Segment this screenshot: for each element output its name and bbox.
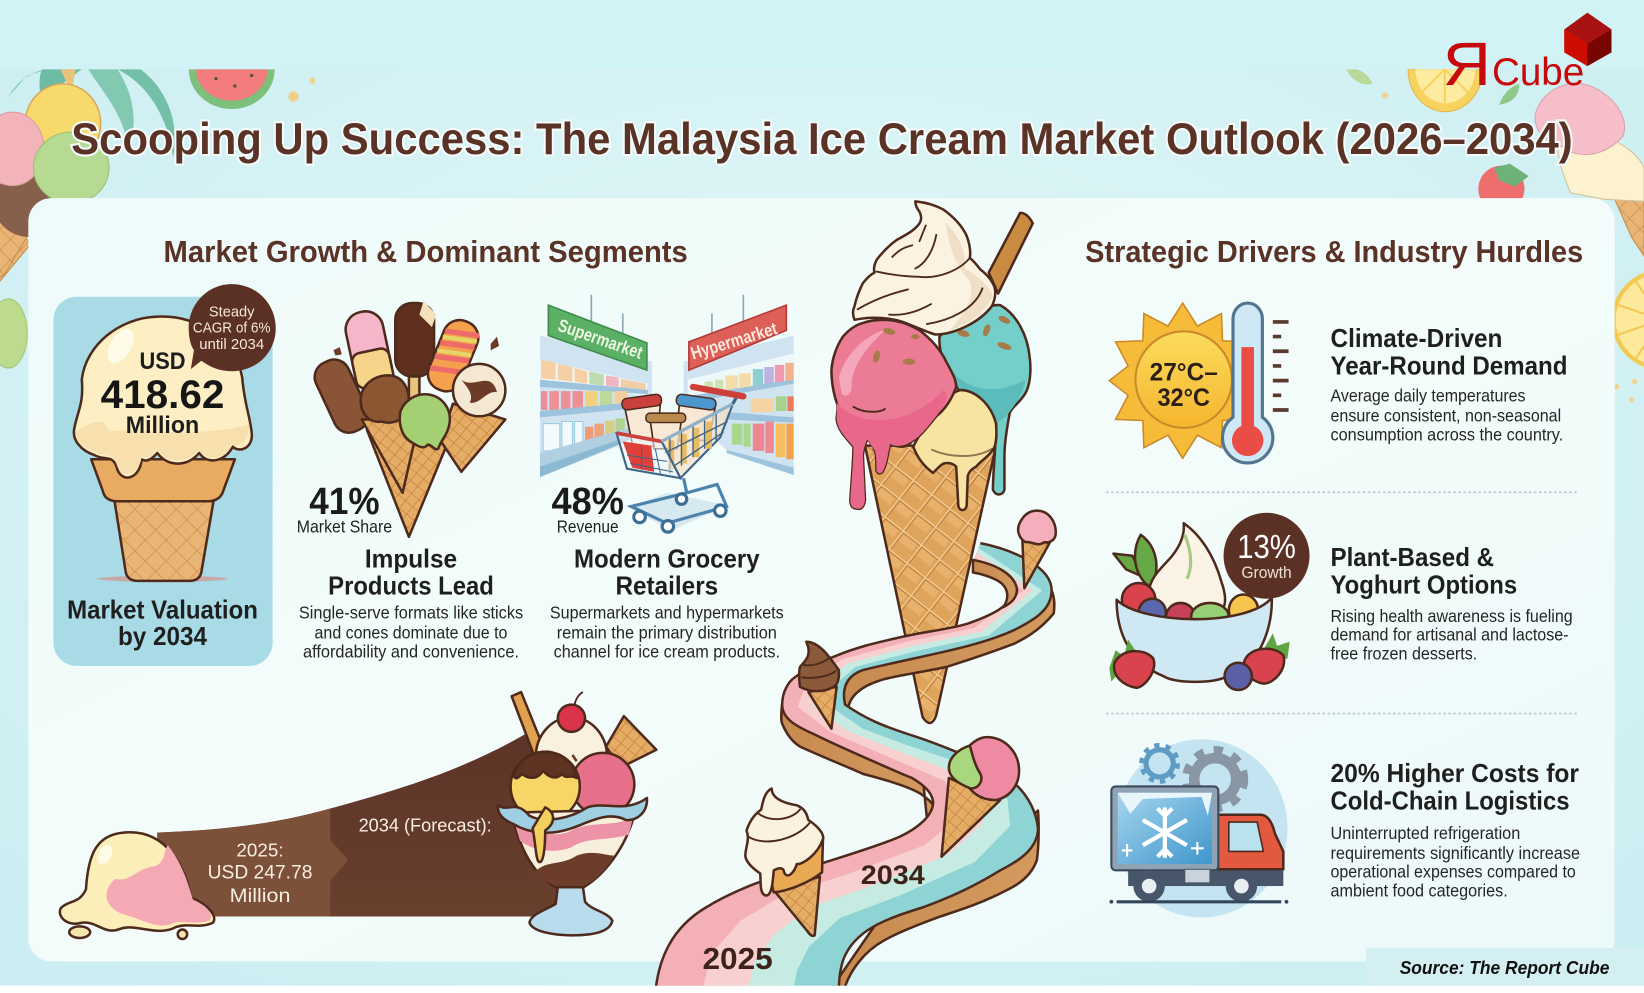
- callout: CAGR badge: CAGR of 6%: [193, 320, 271, 336]
- stat: 41% market share: [297, 480, 392, 537]
- sign: Hypermarket: Hypermarket: [688, 318, 779, 363]
- growth area: [157, 729, 561, 916]
- top band: [0, 0, 1644, 69]
- item: plant-based text: Yoghurt Options: [1331, 569, 1517, 599]
- left shelf: [540, 336, 652, 477]
- panel: market valuation card: [53, 284, 276, 666]
- item: climate text: ensure consistent, non-seasonal: [1331, 406, 1561, 426]
- panel: impulse products: [297, 301, 524, 661]
- label: 2025: 2025: [702, 942, 773, 976]
- impulse heading: [328, 543, 494, 601]
- icon: vanilla soft-serve cone: [745, 789, 823, 936]
- source note: Source: The Report Cube: [1400, 957, 1609, 978]
- label: 2034: 2034: [861, 859, 926, 890]
- item: plant-based text: demand for artisanal and lactose-: [1331, 625, 1569, 645]
- callout: 13% growth badge: 13%: [1237, 529, 1296, 566]
- grocery heading: Modern Grocery: [574, 543, 760, 573]
- impulse description: Single-serve formats like sticks: [299, 603, 524, 623]
- chart: market growth area 2025 to 2034: [60, 692, 656, 939]
- logo: RCube: [1443, 13, 1611, 98]
- impulse description: affordability and convenience.: [303, 641, 519, 661]
- label: 2025 value: USD 247.78: [208, 862, 312, 884]
- item: cold-chain text: requirements significantly increase: [1331, 843, 1580, 863]
- icon: sun with temperature: 27°C–: [1150, 359, 1218, 387]
- value text: [101, 348, 224, 439]
- road edge band: upper segment: [839, 590, 1054, 709]
- grocery description: remain the primary distribution: [557, 623, 777, 643]
- icon: melted scoop: [60, 832, 214, 939]
- icon: sundae: [498, 692, 656, 935]
- stat: 41% market share: 41%: [309, 480, 380, 522]
- cream scoop: [913, 390, 996, 510]
- grocery description: [550, 603, 784, 661]
- callout: CAGR badge: until 2034: [199, 337, 264, 353]
- callout: CAGR badge: [189, 284, 276, 371]
- sign: Hypermarket: [688, 295, 786, 370]
- road inner curl band: [973, 560, 1017, 607]
- teal scoop: [939, 305, 1030, 494]
- icon: thermometer: [1223, 303, 1289, 463]
- icon: large ice cream cone: [831, 201, 1033, 723]
- item: plant-based text: Plant-Based &: [1331, 542, 1494, 572]
- road band: pink: [655, 557, 1023, 993]
- heading: market growth: Market Growth & Dominant Segments: [164, 235, 688, 269]
- stat: 41% market share: Market Share: [297, 517, 392, 537]
- item: plant-based text: free frozen desserts.: [1331, 644, 1477, 664]
- item: plant-based text: [1331, 542, 1573, 664]
- grocery description: channel for ice cream products.: [554, 641, 780, 661]
- label: 2025 value: [208, 840, 312, 907]
- road edge band: left bend: [781, 704, 933, 818]
- sign: Supermarket: [548, 295, 647, 370]
- value text: 418.62: [101, 373, 224, 417]
- impulse description: [299, 603, 524, 661]
- item: climate text: consumption across the country.: [1331, 424, 1563, 444]
- road outline: [655, 543, 1052, 993]
- panel: modern grocery retailers: [540, 295, 794, 661]
- stat: 48% revenue: Revenue: [557, 517, 619, 537]
- icon: small pink cone: [1018, 511, 1056, 588]
- impulse heading: Impulse: [365, 543, 457, 573]
- road: winding ribbon 2025 to 2034: [655, 543, 1054, 993]
- callout: 13% growth badge: [1224, 513, 1310, 599]
- callout: 13% growth badge: Growth: [1241, 564, 1292, 582]
- item: cold-chain text: Cold-Chain Logistics: [1331, 785, 1570, 815]
- stat: 48% revenue: 48%: [551, 480, 624, 522]
- card label: [67, 595, 258, 651]
- item: cold-chain text: ambient food categories.: [1331, 881, 1508, 901]
- card label: Market Valuation: [67, 595, 258, 625]
- road edge band: right bend: [828, 811, 1039, 993]
- source note: [1366, 948, 1644, 986]
- decorative corner illustrations: right: [1346, 69, 1644, 402]
- shopping cart: [616, 387, 743, 532]
- label: 2025 value: Million: [230, 885, 290, 907]
- icon: sun with temperature: [1109, 303, 1260, 458]
- label: 2034 forecast: 2034 (Forecast):: [359, 815, 492, 836]
- title: Scooping Up Success: The Malaysia Ice Cream Market Outlook (2026–2034): [71, 115, 1573, 164]
- icon: chocolate soft-serve cone: [799, 642, 839, 729]
- sign: Supermarket: Supermarket: [555, 315, 645, 363]
- item: climate text: Year-Round Demand: [1331, 350, 1567, 380]
- label: 2025 value: 2025:: [236, 840, 284, 861]
- impulse description: and cones dominate due to: [315, 623, 507, 643]
- item: climate text: Climate-Driven: [1331, 323, 1502, 353]
- icon: popsicles and cones: [310, 301, 505, 537]
- icon: strawberry and pistachio cone: [942, 737, 1019, 857]
- item: climate text: [1331, 323, 1567, 444]
- wafer stick: [989, 213, 1033, 294]
- road surface: [655, 543, 1052, 993]
- main panel: [28, 198, 1615, 962]
- logo: RCube: Cube: [1492, 51, 1584, 94]
- icon: supermarket shelves and cart: [540, 295, 794, 532]
- right shelf: [684, 336, 794, 475]
- icon: refrigerated truck: [1109, 739, 1288, 918]
- logo: RCube: Я: [1443, 30, 1491, 98]
- heading: strategic drivers: Strategic Drivers & Industry Hurdles: [1085, 235, 1583, 269]
- callout: CAGR badge: Steady: [209, 305, 255, 321]
- item: cold-chain text: 20% Higher Costs for: [1331, 758, 1579, 788]
- grocery heading: [574, 543, 760, 601]
- value text: USD: [139, 348, 186, 375]
- icon: yoghurt bowl with fruit: [1109, 513, 1310, 690]
- card label: by 2034: [118, 621, 207, 651]
- grocery heading: Retailers: [615, 571, 718, 601]
- decorative corner illustrations: left: [0, 69, 316, 368]
- item: cold-chain text: [1331, 758, 1580, 901]
- waffle cone: [865, 446, 996, 723]
- item: cold-chain text: operational expenses compared to: [1331, 862, 1576, 882]
- item: climate text: Average daily temperatures: [1331, 386, 1526, 406]
- icon: sun with temperature: 32°C: [1158, 384, 1210, 412]
- road band: pale pink: [704, 552, 1032, 986]
- item: plant-based text: Rising health awareness is fueling: [1331, 606, 1573, 626]
- impulse heading: Products Lead: [328, 571, 494, 601]
- value text: Million: [126, 412, 199, 439]
- road band: pale aqua: [748, 548, 1042, 986]
- icon: ice cream cup: [74, 317, 252, 582]
- pink scoop: [831, 320, 956, 509]
- grocery description: Supermarkets and hypermarkets: [550, 603, 784, 623]
- item: cold-chain text: Uninterrupted refrigeration: [1331, 823, 1520, 843]
- whipped cream swirl: [853, 201, 995, 334]
